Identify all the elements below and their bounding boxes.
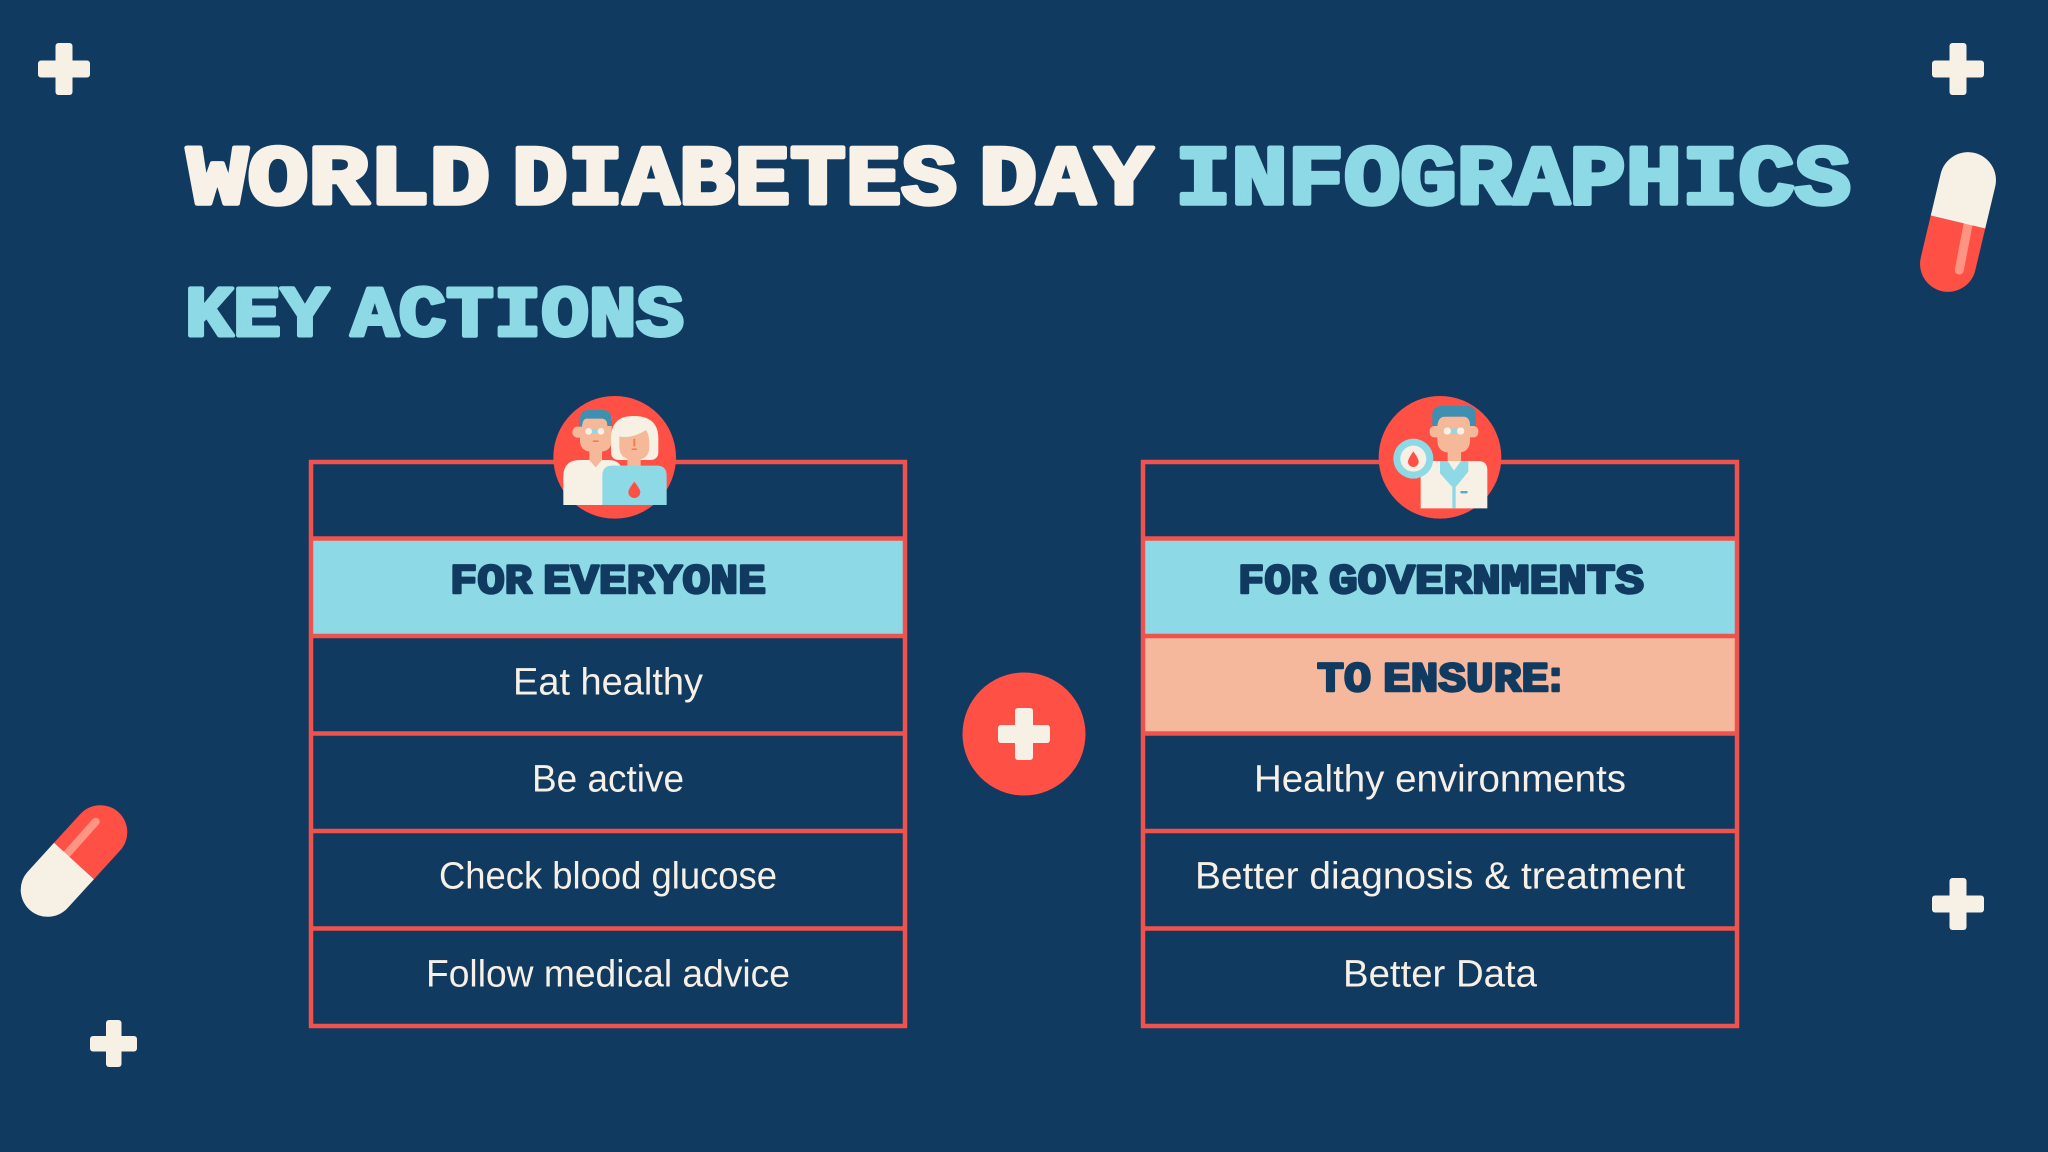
subtitle: key actions: ACTIONS [351, 278, 684, 358]
list item: better diagnosis and treatment: Better diagnosis & treatment [1195, 856, 1685, 898]
heading: to ensure: : [1543, 656, 1568, 704]
heading: for governments: GOVERNMENTS [1329, 558, 1644, 606]
list item: follow medical advice: Follow medical advice [426, 954, 790, 996]
heading: for everyone: FOR [450, 558, 533, 606]
heading: to ensure [1317, 656, 1568, 704]
list item: better data: Better Data [1343, 954, 1538, 996]
icon: capsule lower left [10, 794, 138, 928]
subtitle: key actions [185, 278, 684, 358]
icon: couple [553, 396, 676, 519]
icon: plus top left [38, 43, 90, 95]
heading: for governments: FOR [1238, 558, 1318, 606]
title: WORLD [187, 134, 490, 230]
panel: for everyone [311, 462, 905, 1026]
list item: check blood glucose: Check blood glucose [439, 856, 777, 898]
title: INFOGRAPHICS [1175, 134, 1851, 230]
list item: eat healthy: Eat healthy [513, 662, 703, 704]
panel: for governments [1143, 462, 1737, 1026]
icon: plus lower left [90, 1020, 137, 1067]
icon: plus lower right [1932, 878, 1984, 930]
title: DIABETES [512, 134, 957, 230]
subtitle: key actions: KEY [185, 278, 329, 358]
list item: healthy environments: Healthy environments [1254, 758, 1626, 800]
heading: for governments [1238, 558, 1644, 606]
icon: capsule top right [1914, 146, 2002, 298]
heading: for everyone: EVERYONE [543, 558, 766, 606]
heading: to ensure: ENSURE [1383, 656, 1549, 704]
icon: doctor [1379, 396, 1501, 519]
heading: to ensure: TO [1317, 656, 1371, 704]
icon: plus top right [1932, 43, 1984, 95]
title: DAY [979, 134, 1154, 230]
icon: centre plus badge [962, 672, 1086, 796]
heading: for everyone [450, 558, 766, 606]
title [187, 134, 1851, 230]
list item: be active: Be active [532, 758, 684, 800]
